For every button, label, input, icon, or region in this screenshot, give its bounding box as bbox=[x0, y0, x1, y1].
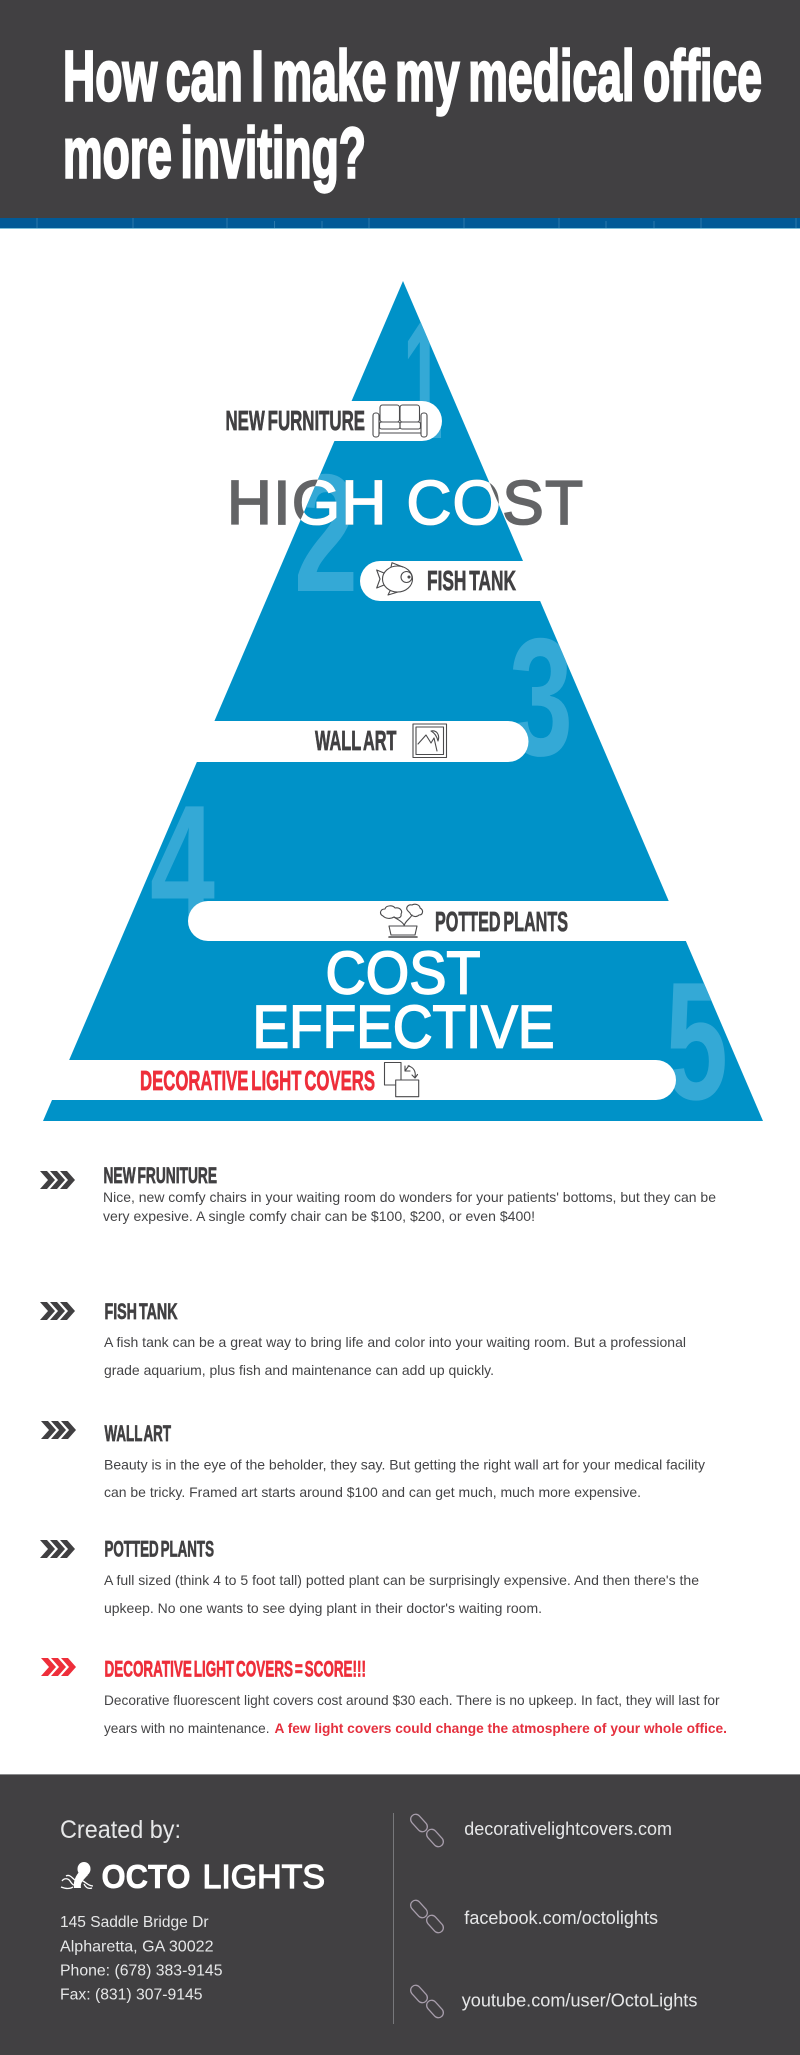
logo: octo lights: LIGHTS bbox=[202, 1858, 325, 1895]
link: youtube: youtube.com/user/OctoLights bbox=[462, 1990, 697, 2011]
section: wall art bbox=[41, 1421, 705, 1500]
address: Alpharetta, GA 30022 bbox=[60, 1938, 214, 1956]
pyramid tier numbers bbox=[150, 286, 728, 1135]
icon: fish bbox=[377, 563, 412, 595]
link: facebook bbox=[409, 1898, 658, 1935]
tier bar: potted plants bbox=[188, 901, 720, 941]
icon: red chevrons bbox=[41, 1658, 76, 1676]
pyramid tier numbers: 5 bbox=[665, 947, 728, 1135]
icon: chain link bbox=[409, 1898, 445, 1935]
tier bar: fish tank: FISH TANK bbox=[427, 565, 516, 596]
section: wall art: WALL ART bbox=[104, 1421, 171, 1446]
pyramid bbox=[30, 281, 763, 1135]
tier label: high cost: HIGH COST bbox=[227, 469, 583, 538]
section: decorative light covers bbox=[41, 1657, 727, 1736]
icon: chevrons bbox=[40, 1171, 75, 1189]
section: new furniture: NEW FRUNITURE bbox=[104, 1163, 217, 1188]
address: 145 Saddle Bridge Dr bbox=[60, 1914, 209, 1931]
icon: sofa bbox=[373, 405, 427, 437]
tier bar: wall art: WALL ART bbox=[315, 725, 397, 756]
icon: chevrons bbox=[41, 1421, 76, 1439]
created by: Created by: bbox=[60, 1816, 181, 1844]
icon: potted plant bbox=[381, 904, 423, 937]
section: potted plants: POTTED PLANTS bbox=[104, 1537, 214, 1562]
address bbox=[60, 1914, 223, 2003]
tier bar: new furniture: NEW FURNITURE bbox=[226, 405, 365, 436]
section: potted plants: upkeep. No one wants to see dying plant in their doctor's waiting room. bbox=[104, 1600, 542, 1616]
section: decorative light covers: A few light covers could change the atmosphere of your whole office. bbox=[274, 1720, 727, 1736]
section: fish tank: FISH TANK bbox=[104, 1299, 178, 1324]
pyramid tier numbers: 3 bbox=[509, 603, 573, 791]
section: decorative light covers: years with no maintenance. bbox=[104, 1720, 270, 1736]
section: fish tank: A fish tank can be a great way to bring life and color into your waiting room. But a professional bbox=[104, 1334, 686, 1350]
tier bar: fish tank bbox=[360, 561, 600, 601]
pyramid body bbox=[43, 281, 763, 1121]
footer panel bbox=[0, 1774, 800, 2055]
title bbox=[63, 38, 762, 194]
link: youtube bbox=[409, 1983, 697, 2020]
section: fish tank bbox=[40, 1299, 686, 1378]
address: Fax: (831) 307-9145 bbox=[60, 1986, 203, 2003]
section: wall art: can be tricky. Framed art starts around $100 and can get much, much more expensive. bbox=[104, 1484, 641, 1500]
icon: chain link bbox=[409, 1983, 445, 2020]
header banner bbox=[0, 0, 800, 229]
tier label: cost effective: EFFECTIVE bbox=[252, 994, 554, 1060]
tier label: cost effective: COST bbox=[326, 940, 480, 1006]
section: decorative light covers: Decorative fluorescent light covers cost around $30 each. There is no upkeep. In fact, they will last for bbox=[104, 1692, 720, 1708]
tier bar: decorative light covers bbox=[30, 1060, 676, 1100]
section: new furniture bbox=[40, 1163, 716, 1224]
link: website: decorativelightcovers.com bbox=[464, 1818, 672, 1839]
section: new furniture: Nice, new comfy chairs in your waiting room do wonders for your patients' bottoms, but they can be bbox=[103, 1189, 716, 1205]
pyramid tier numbers: 4 bbox=[150, 770, 215, 958]
tier bar: wall art bbox=[170, 721, 528, 762]
icon: octopus bbox=[61, 1862, 93, 1888]
tier label: high cost: HIGH COST bbox=[227, 469, 583, 538]
icon: chevrons bbox=[40, 1302, 75, 1320]
pyramid tier numbers: 1 bbox=[403, 286, 443, 474]
icon: chain link bbox=[409, 1812, 445, 1849]
logo: octo lights: OCTO bbox=[102, 1858, 190, 1895]
icon: chevrons bbox=[40, 1540, 75, 1558]
address: Phone: (678) 383-9145 bbox=[60, 1962, 223, 1979]
pyramid tier numbers: 2 bbox=[294, 439, 358, 627]
tier label: cost effective bbox=[252, 940, 554, 1060]
tier bar: new furniture bbox=[200, 401, 442, 441]
tier label: high cost bbox=[231, 480, 582, 526]
section: potted plants: A full sized (think 4 to 5 foot tall) potted plant can be surprisingly expensive. And then there's the bbox=[104, 1572, 699, 1588]
logo: octo lights bbox=[61, 1858, 325, 1895]
link: facebook: facebook.com/octolights bbox=[464, 1907, 658, 1928]
section: new furniture: very expesive. A single comfy chair can be $100, $200, or even $400! bbox=[103, 1208, 535, 1224]
section: wall art: Beauty is in the eye of the beholder, they say. But getting the right wall art for your medical facility bbox=[104, 1456, 705, 1472]
section: decorative light covers: DECORATIVE LIGHT COVERS = SCORE!!! bbox=[104, 1657, 366, 1682]
icon: light cover swap bbox=[384, 1062, 419, 1097]
section: potted plants bbox=[40, 1537, 699, 1616]
section: fish tank: grade aquarium, plus fish and maintenance can add up quickly. bbox=[104, 1362, 494, 1378]
tier bar: decorative light covers: DECORATIVE LIGHT COVERS bbox=[140, 1065, 375, 1096]
link: website bbox=[409, 1812, 672, 1849]
icon: framed art bbox=[413, 724, 446, 758]
tier bar: potted plants: POTTED PLANTS bbox=[435, 906, 568, 937]
title: more inviting? bbox=[63, 114, 366, 194]
